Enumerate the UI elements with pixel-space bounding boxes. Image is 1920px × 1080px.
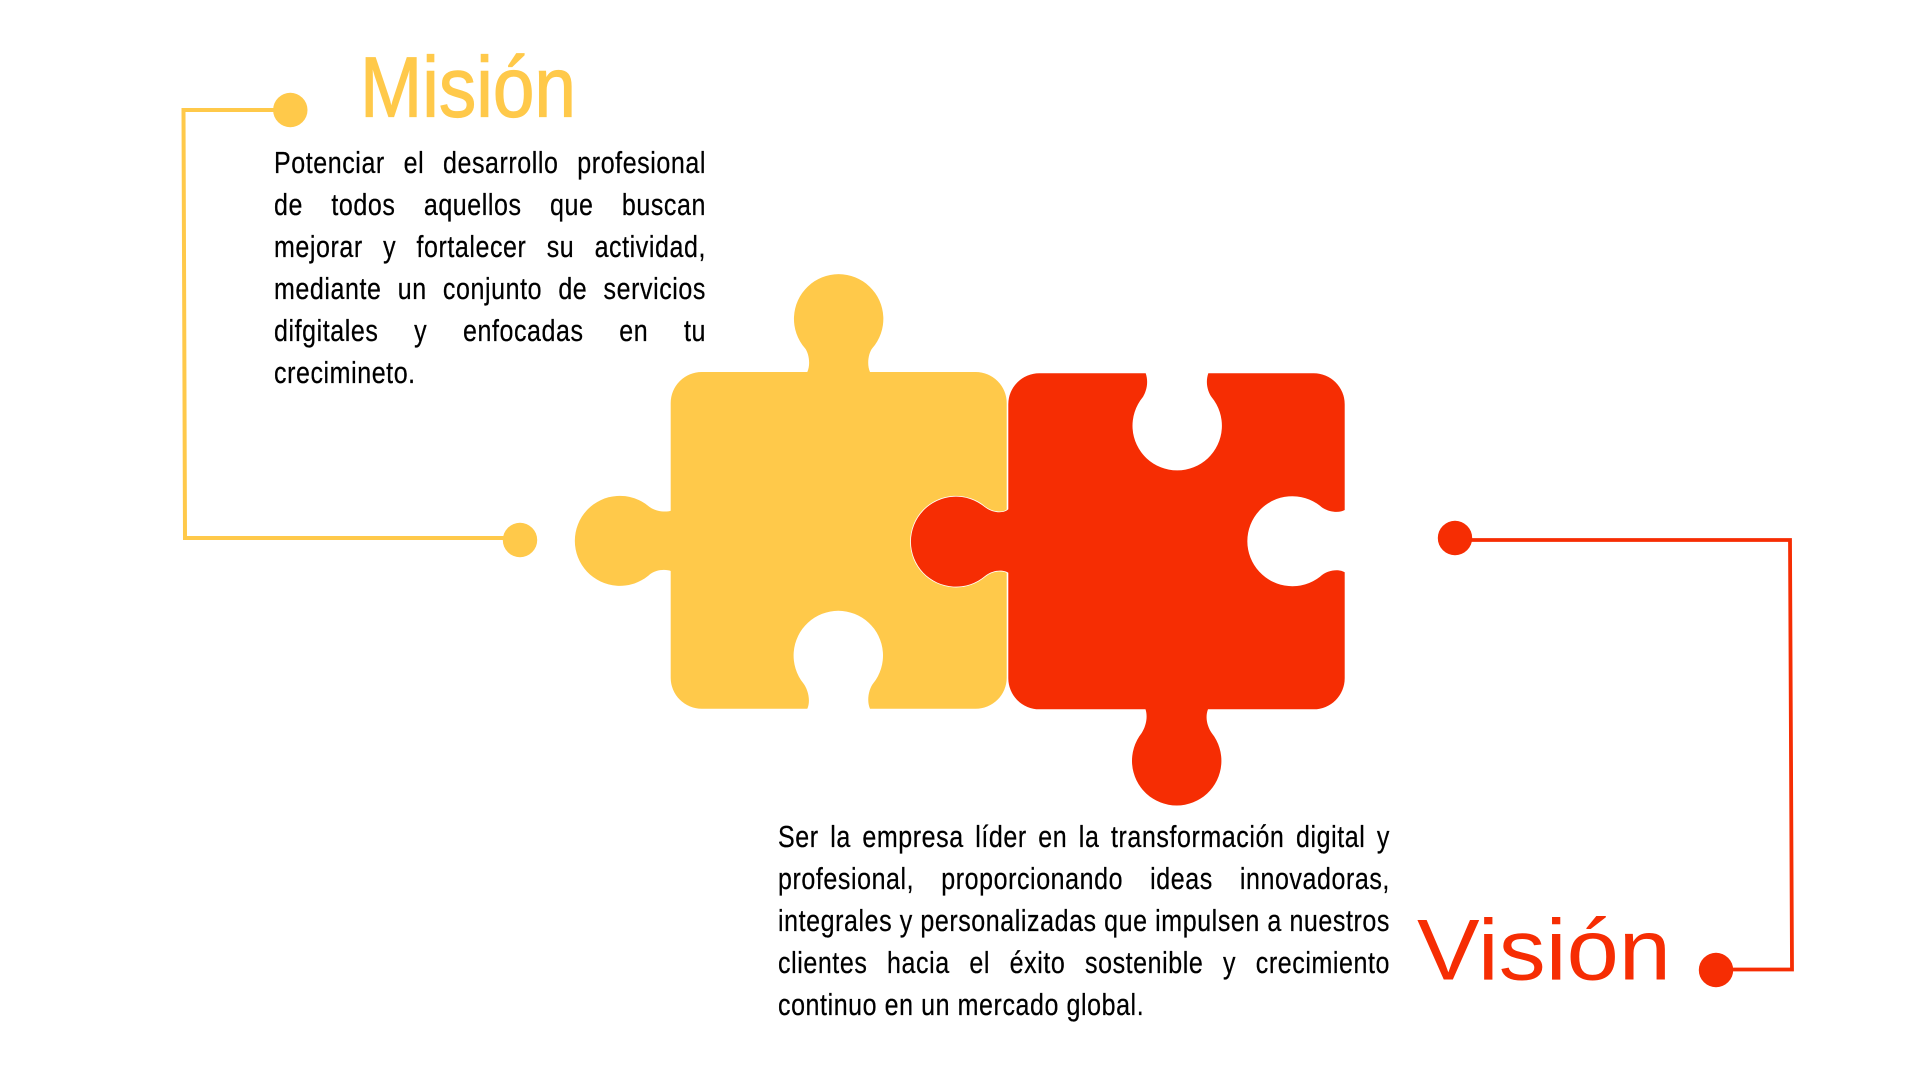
connector: vision line with dots bbox=[1438, 521, 1792, 987]
text block: vision statement: integrales y personalizadas que impulsen a nuestros bbox=[778, 904, 1390, 938]
text block: vision statement: clientes hacia el éxito sostenible y crecimiento bbox=[778, 946, 1390, 980]
text block: vision statement: continuo en un mercado global. bbox=[778, 988, 1144, 1022]
connector: mission line with dots bbox=[184, 93, 537, 557]
heading: Misión: Misión bbox=[360, 41, 576, 136]
text block: mission statement bbox=[274, 146, 706, 390]
text block: mission statement: de todos aquellos que buscan bbox=[274, 188, 706, 222]
text block: vision statement: profesional, proporcionando ideas innovadoras, bbox=[778, 862, 1390, 896]
text block: mission statement: crecimineto. bbox=[274, 356, 416, 390]
text block: mission statement: Potenciar el desarrollo profesional bbox=[274, 146, 706, 180]
text block: mission statement: mejorar y fortalecer su actividad, bbox=[274, 230, 706, 264]
puzzle piece: red bbox=[911, 373, 1345, 806]
text block: vision statement: Ser la empresa líder en la transformación digital y bbox=[778, 820, 1390, 854]
text block: vision statement bbox=[778, 820, 1390, 1022]
heading: Visión: Visión bbox=[1417, 902, 1671, 998]
text block: mission statement: mediante un conjunto de servicios bbox=[274, 272, 706, 306]
text block: mission statement: difgitales y enfocadas en tu bbox=[274, 314, 706, 348]
puzzle piece: yellow bbox=[575, 274, 1007, 709]
